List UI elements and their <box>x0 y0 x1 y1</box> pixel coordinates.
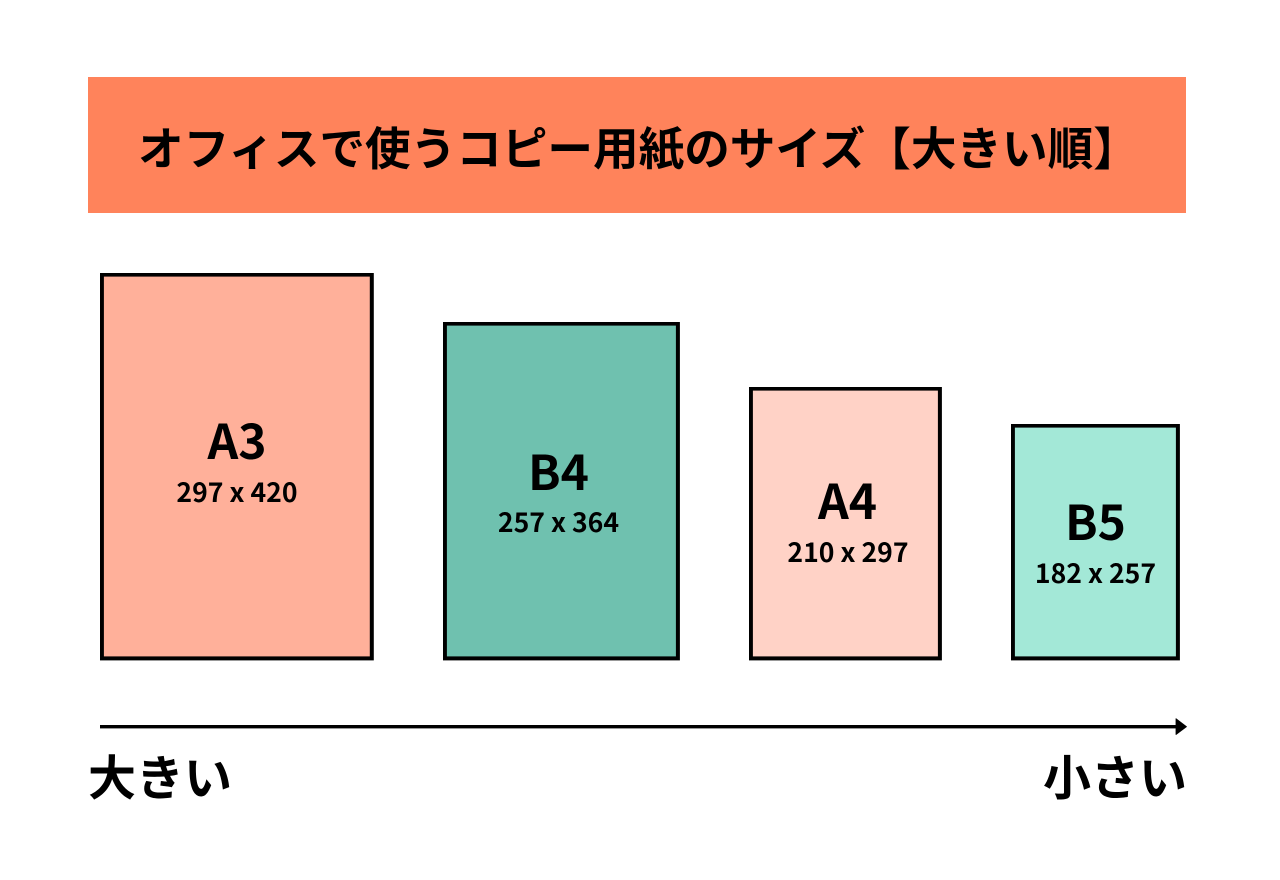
panel: B5 sheet <box>1011 424 1180 660</box>
A3 label: A3 <box>207 403 267 473</box>
A3 dimensions: 297 x 420 <box>176 471 298 510</box>
B5 dimensions: 182 x 257 <box>1035 552 1156 591</box>
A4 label: A4 <box>818 463 877 533</box>
A4 dimensions: 210 x 297 <box>787 531 909 570</box>
panel: A4 sheet <box>749 387 942 660</box>
B4 dimensions: 257 x 364 <box>498 501 619 540</box>
label: large: 大きい <box>88 739 232 809</box>
label: small: 小さい <box>1043 739 1187 809</box>
panel: B4 sheet <box>443 322 680 660</box>
panel: A3 sheet <box>100 273 374 660</box>
title banner <box>88 77 1186 213</box>
arrow: large to small <box>100 718 1187 735</box>
title: オフィスで使うコピー用紙のサイズ【大きい順】 <box>138 112 1139 178</box>
B4 label: B4 <box>528 434 589 504</box>
B5 label: B5 <box>1065 484 1126 554</box>
